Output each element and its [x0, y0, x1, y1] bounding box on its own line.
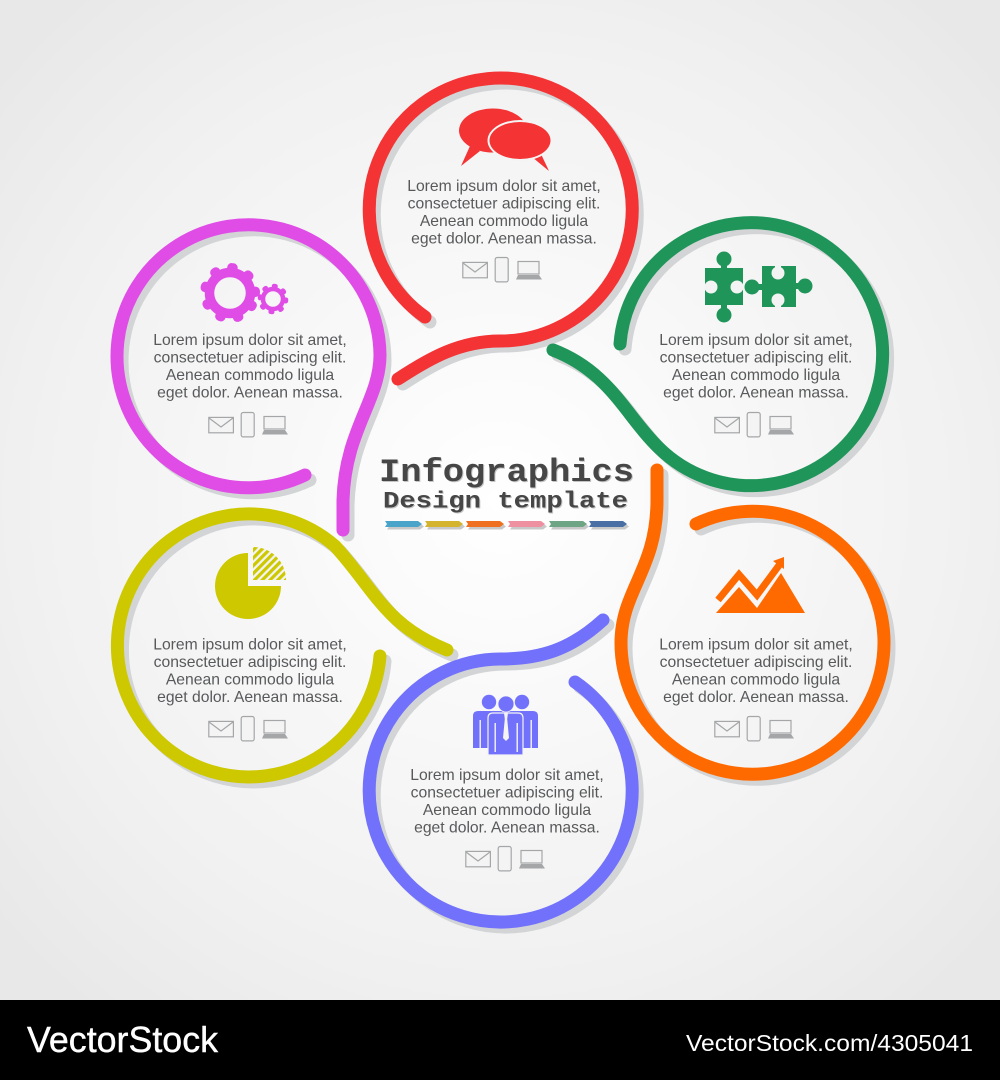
- icons: contact devices: [209, 716, 288, 741]
- text block: Aenean commodo ligula: [166, 672, 334, 688]
- icon: gears: [204, 268, 286, 318]
- title: Infographics: [380, 455, 635, 492]
- text block: consectetuer adipiscing elit.: [660, 350, 852, 366]
- magenta ring: [117, 225, 380, 530]
- text block: Aenean commodo ligula: [423, 802, 591, 819]
- icon: people: [473, 695, 538, 755]
- decorative arrow row: [385, 521, 629, 530]
- green ring: [553, 223, 883, 486]
- text block: consectetuer adipiscing elit.: [408, 196, 600, 212]
- text block: Aenean commodo ligula: [420, 213, 588, 230]
- icons: contact devices: [463, 258, 542, 282]
- text block: eget dolor. Aenean massa.: [663, 689, 849, 706]
- text block: Lorem ipsum dolor sit amet,: [153, 332, 347, 349]
- panel: magenta gears: [117, 225, 380, 530]
- text block: consectetuer adipiscing elit.: [660, 654, 852, 671]
- text block: consectetuer adipiscing elit.: [154, 350, 346, 366]
- text block: eget dolor. Aenean massa.: [157, 689, 343, 706]
- footer url: VectorStock.com/4305041: [686, 1030, 973, 1056]
- footer bar: [0, 1000, 1000, 1080]
- text block: Aenean commodo ligula: [672, 672, 840, 688]
- title: Design template: [384, 490, 629, 516]
- icon: puzzle pieces: [704, 252, 812, 322]
- icons: contact devices: [209, 412, 288, 437]
- icon: rising chart: [716, 557, 805, 613]
- red ring: [369, 78, 632, 379]
- blue ring: [369, 620, 632, 922]
- title: [379, 454, 635, 516]
- yellow ring: [117, 514, 447, 777]
- text block: Aenean commodo ligula: [672, 367, 840, 384]
- text block: Lorem ipsum dolor sit amet,: [659, 332, 853, 349]
- text block: Lorem ipsum dolor sit amet,: [407, 178, 601, 195]
- text block: consectetuer adipiscing elit.: [411, 784, 603, 802]
- text block: consectetuer adipiscing elit.: [154, 654, 346, 671]
- text block: Lorem ipsum dolor sit amet,: [153, 636, 347, 654]
- text block: Lorem ipsum dolor sit amet,: [659, 636, 853, 654]
- title: Design template: [383, 488, 628, 514]
- text block: eget dolor. Aenean massa.: [414, 820, 600, 836]
- icon: pie chart: [215, 547, 286, 619]
- footer logo: VectorStock: [27, 1019, 219, 1060]
- text block: Lorem ipsum dolor sit amet,: [410, 767, 604, 784]
- icon: speech bubbles: [459, 108, 552, 171]
- text block: Aenean commodo ligula: [166, 367, 334, 384]
- text block: eget dolor. Aenean massa.: [157, 384, 343, 402]
- icons: contact devices: [715, 716, 794, 741]
- panel: yellow pie: [117, 514, 447, 777]
- panel: green puzzle: [553, 223, 883, 486]
- icons: contact devices: [715, 412, 794, 437]
- title: Infographics: [379, 454, 634, 491]
- ring shadows: [122, 83, 889, 927]
- text block: eget dolor. Aenean massa.: [663, 384, 849, 402]
- panel: orange chart: [621, 470, 884, 774]
- orange ring: [621, 470, 884, 774]
- icons: contact devices: [466, 846, 545, 871]
- text block: eget dolor. Aenean massa.: [411, 230, 597, 248]
- panel: blue team: [369, 620, 632, 922]
- panel: red speech: [369, 78, 632, 379]
